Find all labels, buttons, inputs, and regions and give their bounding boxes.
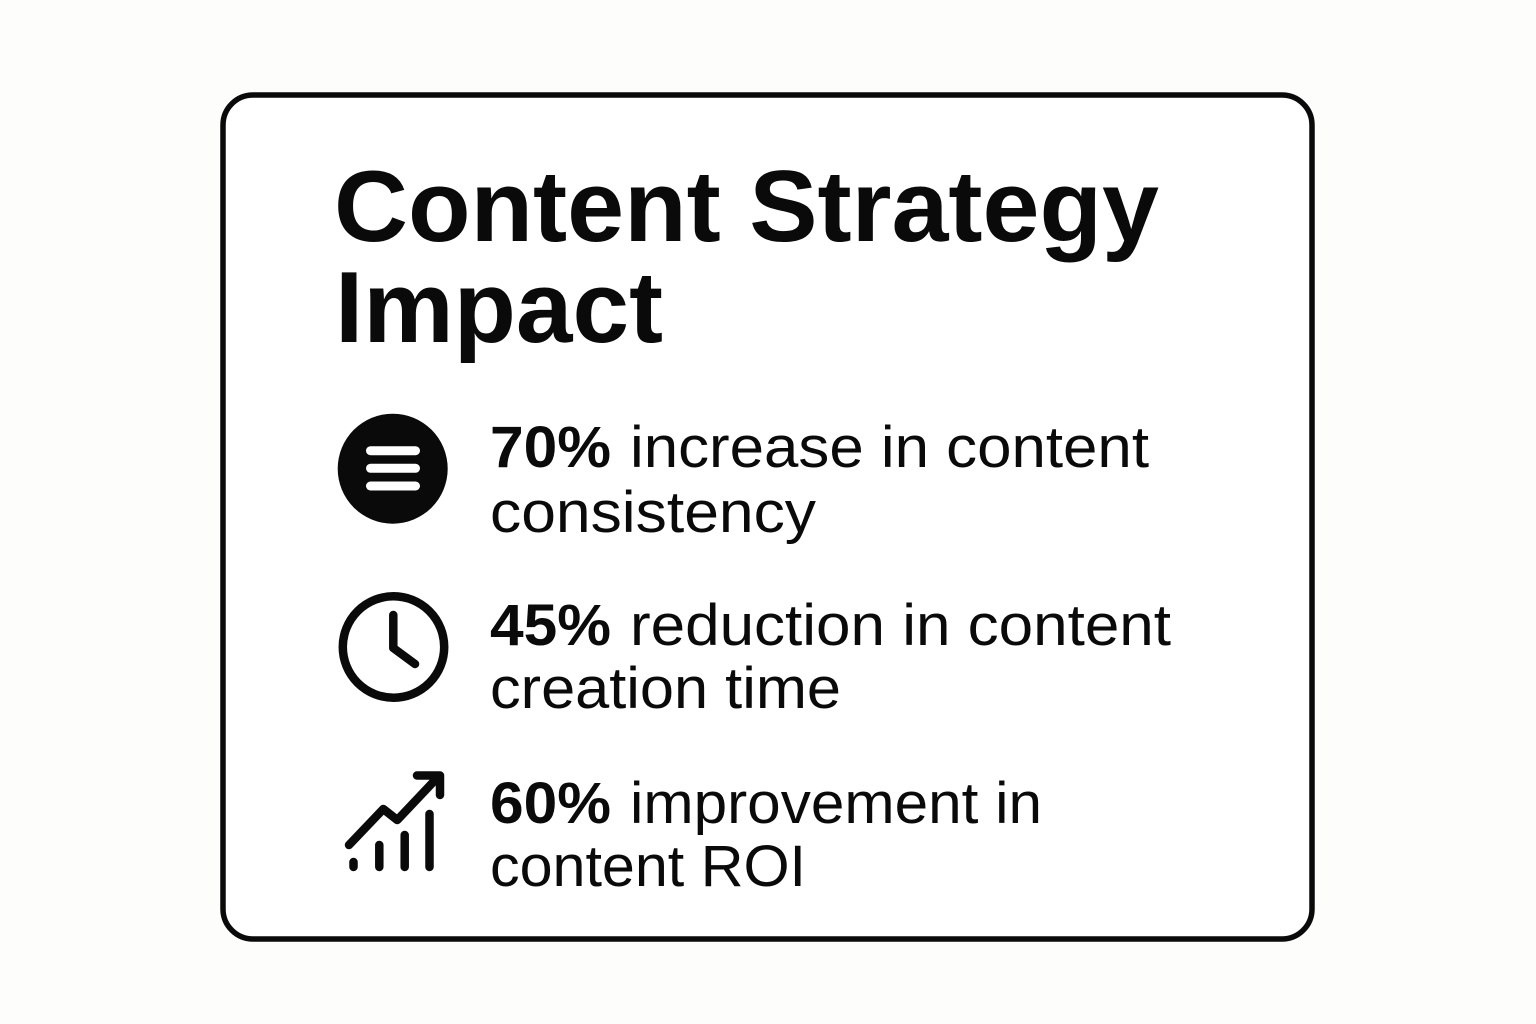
title: Content Strategy bbox=[334, 151, 1159, 263]
text: 45% reduction in content creation time bbox=[490, 593, 1171, 721]
icon: menu lines in solid circle bbox=[338, 414, 448, 524]
icon: clock bbox=[343, 596, 444, 698]
text: 70% increase in content consistency: 70% bbox=[490, 415, 611, 480]
text: 60% improvement in content ROI bbox=[490, 771, 1042, 899]
item: content ROI bbox=[349, 771, 1042, 899]
panel: content strategy impact card bbox=[223, 95, 1312, 939]
text: 45% reduction in content creation time: reduction in content bbox=[630, 593, 1171, 658]
item: content consistency bbox=[338, 414, 1149, 545]
text: 70% increase in content consistency: consistency bbox=[490, 480, 816, 545]
text: 60% improvement in content ROI: improvement in bbox=[630, 771, 1042, 836]
text: 60% improvement in content ROI: content ROI bbox=[490, 834, 806, 899]
title bbox=[334, 151, 1159, 364]
item: content creation time bbox=[343, 593, 1171, 721]
text: 70% increase in content consistency: increase in content bbox=[630, 415, 1149, 480]
text: 60% improvement in content ROI: 60% bbox=[490, 771, 611, 836]
icon: rising chart with arrow bbox=[349, 776, 440, 867]
text: 45% reduction in content creation time: 45% bbox=[490, 593, 611, 658]
text: 70% increase in content consistency bbox=[490, 415, 1149, 545]
text: 45% reduction in content creation time: creation time bbox=[490, 656, 841, 721]
title: Impact bbox=[335, 252, 663, 364]
